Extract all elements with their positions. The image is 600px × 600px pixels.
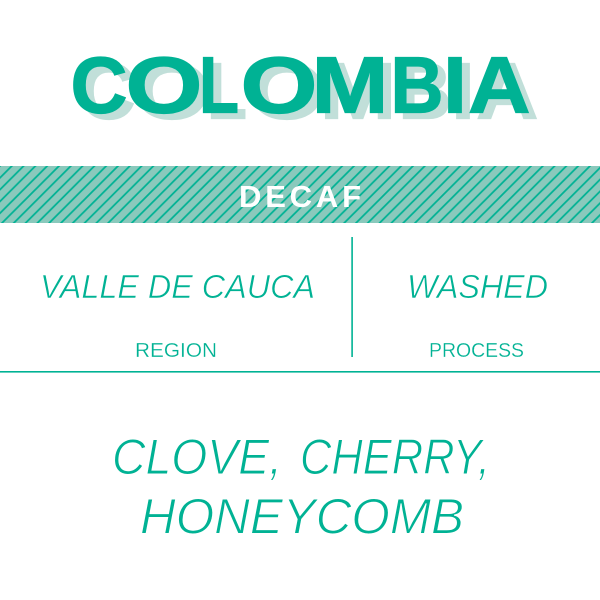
title shadow [78,46,538,135]
title main: M [312,40,388,129]
flavor notes [112,428,490,544]
title main: O [126,40,202,129]
title main: C [70,40,128,129]
horizontal divider [0,371,600,373]
title main [70,40,530,129]
flavor line 1: CLOVE, [112,428,282,485]
title main: A [468,40,530,129]
flavor line 1 [112,428,490,485]
title shadow: I [451,46,475,135]
title shadow: L [207,46,247,135]
title main: I [443,40,467,129]
vertical divider [351,237,353,357]
title: COLOMBIA [70,40,538,135]
title main: O [240,40,318,129]
title shadow: M [320,46,396,135]
flavor line 2: HONEYCOMB [140,488,464,544]
title shadow: O [248,46,326,135]
title shadow: B [398,46,452,135]
title shadow: O [134,46,210,135]
title main: L [199,40,239,129]
region label: REGION [135,339,217,362]
process column [407,268,548,362]
region column [40,268,315,362]
process label: PROCESS [429,339,524,362]
title shadow: A [476,46,538,135]
title shadow: C [78,46,136,135]
title main: B [390,40,444,129]
region value: VALLE DE CAUCA [40,268,315,305]
banner label: DECAF [239,179,361,214]
striped banner: DECAF [0,166,600,223]
flavor line 1: CHERRY, [300,428,490,485]
process value: WASHED [407,268,548,305]
